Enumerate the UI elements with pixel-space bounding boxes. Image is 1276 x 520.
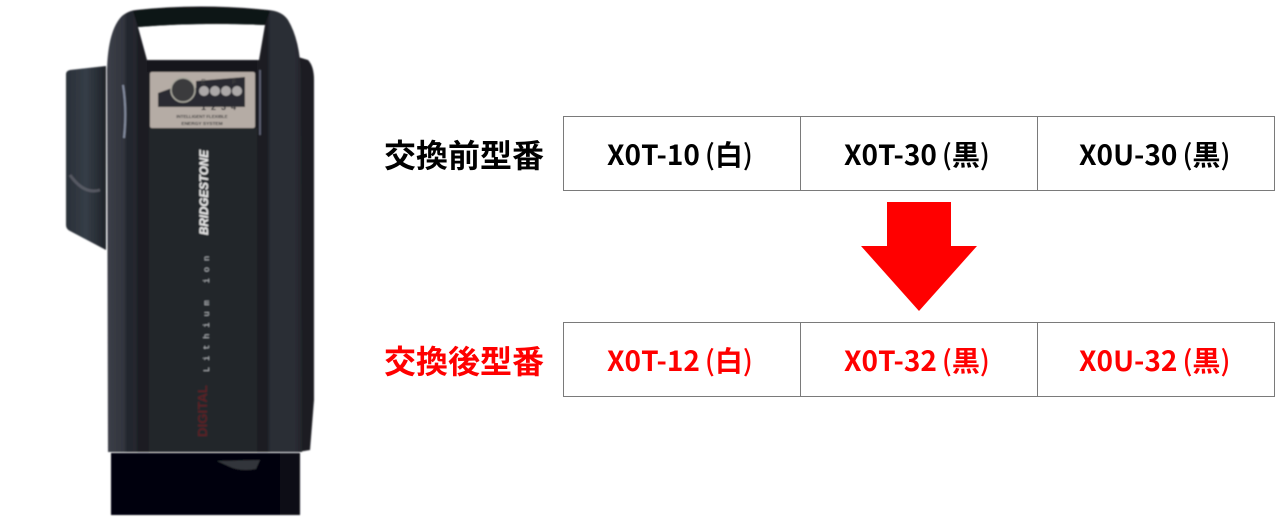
red model mark: DIGITAL	[195, 385, 210, 437]
table: after model numbers	[563, 322, 1275, 397]
heading: before model numbers: 交換前型番	[384, 131, 544, 177]
table: after model numbers: )	[743, 340, 753, 380]
table: after model numbers: )	[1220, 340, 1230, 380]
table: after model numbers: X0T-32 黒	[844, 340, 980, 380]
right highlight	[259, 70, 261, 135]
table: before model numbers: (	[1182, 134, 1192, 174]
table: before model numbers: X0T-10 白	[607, 134, 743, 174]
indicator label plate: F	[232, 79, 236, 86]
right rear edge	[298, 57, 314, 452]
brand name: BRIDGESTONE	[197, 149, 211, 235]
black base	[111, 453, 300, 515]
side connector box	[66, 66, 106, 250]
table: before model numbers: )	[1220, 134, 1230, 174]
table: before model numbers: X0T-30 黒	[844, 134, 980, 174]
battery photo	[64, 5, 316, 516]
table: after model numbers: (	[705, 340, 715, 380]
table: before model numbers: )	[980, 134, 990, 174]
table: after model numbers: (	[942, 340, 952, 380]
table: before model numbers	[563, 116, 1275, 191]
table: before model numbers: )	[743, 134, 753, 174]
battery body with handle	[107, 6, 302, 452]
table: after model numbers: X0U-32 黒	[1079, 340, 1220, 380]
left highlight	[123, 85, 125, 138]
table: after model numbers: )	[980, 340, 990, 380]
table: before model numbers: (	[705, 134, 715, 174]
table: after model numbers: X0T-12 白	[607, 340, 743, 380]
indicator label plate: INTELLIGENT FLEXIBLE	[176, 114, 228, 119]
indicator label plate: ENERGY SYSTEM	[181, 121, 223, 127]
front panel	[149, 128, 257, 452]
heading: after model numbers: 交換後型番	[384, 337, 544, 383]
indicator label plate	[150, 72, 255, 128]
table: after model numbers: (	[1182, 340, 1192, 380]
arrow: before to after	[861, 202, 977, 311]
table: before model numbers: (	[942, 134, 952, 174]
product name: Lithium ion	[202, 250, 212, 372]
indicator label plate: 1234	[201, 102, 241, 112]
handle top bar	[133, 8, 270, 27]
indicator label plate: E	[201, 79, 206, 86]
table: before model numbers: X0U-30 黒	[1079, 134, 1220, 174]
